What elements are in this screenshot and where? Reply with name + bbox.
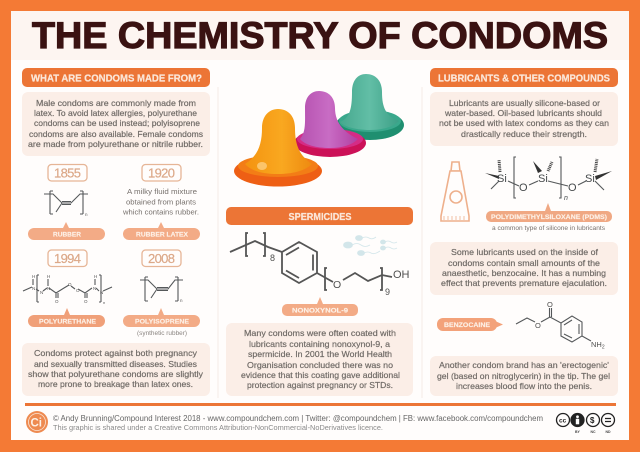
label: rubber <box>28 222 105 240</box>
chemical structure: polyurethane: H <box>32 274 35 279</box>
chemical structure: rubber: n <box>85 212 88 217</box>
text block: protection <box>22 343 210 396</box>
label: rubber latex <box>123 222 200 240</box>
text block: benzocaine: Some lubricants used on the inside of <box>451 247 599 257</box>
icon: creative commons badges <box>556 414 614 434</box>
text block: benzocaine: condoms contain small amounts of the <box>448 258 600 268</box>
year: 1994 <box>48 250 87 266</box>
text block: spermicide evidence: spermicide. In 2001 the World Health <box>248 349 392 359</box>
text block: benzocaine: anaesthetic, benzocaine. It has a numbing <box>442 268 606 278</box>
chemical structure: PDMS: O <box>568 182 577 194</box>
chemical structure: nonoxynol-9: O <box>333 279 341 291</box>
text block: erectogenic gel: gel (based on nitroglycerin) in the tip. The gel <box>437 371 610 381</box>
icon: creative commons badges: $ <box>590 416 595 425</box>
text block: spermicide evidence: Organisation concluded there was no <box>247 360 393 370</box>
chemical structure: polyurethane: N <box>47 286 50 291</box>
title: THE CHEMISTRY OF CONDOMS <box>32 14 608 56</box>
text block: male condoms: latex. To avoid latex allergies, polyurethane <box>34 108 197 118</box>
text block: male condoms: are made from polyurethane or nitrile rubber. <box>28 139 203 149</box>
icon: creative commons badges: NC <box>590 430 596 434</box>
chemical structure: benzocaine: NH <box>591 340 602 349</box>
text block: protection: Condoms protect against both pregnancy <box>34 348 198 358</box>
text block: lubricants: water-based. Oil-based lubricants should <box>444 108 602 118</box>
chemical structure: polyurethane: O <box>84 299 88 304</box>
text block: erectogenic gel: increases blood flow into the penis. <box>456 381 592 391</box>
credits: © Andy Brunning/Compound Interest 2018 - www.compoundchem.com | Twitter: @compoundchem | FB: www.facebook.com/compoundchem <box>53 414 543 423</box>
orange condom <box>234 109 322 186</box>
text block: spermicide evidence: evidence that this coating gave additional <box>241 370 400 380</box>
label: polyurethane: POLYURETHANE <box>39 318 97 325</box>
chemical structure: PDMS <box>485 157 612 202</box>
heading: what are condoms made from <box>22 68 210 87</box>
heading: lubricants <box>430 68 618 87</box>
text block: erectogenic gel: Another condom brand has an 'erectogenic' <box>439 360 609 370</box>
label: nonoxynol-9 <box>282 297 358 316</box>
chemical structure: rubber <box>44 191 88 217</box>
label: nonoxynol-9: NONOXYNOL-9 <box>292 307 349 314</box>
chemical structure: PDMS: Si <box>538 173 548 185</box>
footer rule <box>25 403 616 406</box>
text: rubber latex description: obtained from plants <box>126 198 196 206</box>
icon: lubricant tube <box>441 162 469 221</box>
text block: lubricants <box>430 92 618 146</box>
chemical structure: nonoxynol-9: OH <box>393 269 410 281</box>
chemical structure: polyurethane: N <box>93 286 96 291</box>
year: 1920 <box>142 164 181 181</box>
label: polyisoprene: POLYISOPRENE <box>135 318 190 325</box>
logo: compound interest <box>26 411 48 433</box>
chemical structure: PDMS: Si <box>585 173 595 185</box>
chemical structure: benzocaine: O <box>535 321 541 330</box>
text block: protection: and sexually transmitted diseases. Studies <box>34 359 197 369</box>
label: rubber latex: RUBBER LATEX <box>136 231 189 238</box>
text block: protection: more prone to breakage than latex ones. <box>38 379 193 389</box>
green condom <box>336 74 404 140</box>
text block: spermicide evidence: Many condoms were often coated with <box>244 328 396 338</box>
illustration: three coloured condoms <box>234 74 404 186</box>
text block: spermicide evidence: lubricants containing nonoxynol-9, a <box>249 339 390 349</box>
panel: lubricants and other compounds <box>430 68 618 396</box>
icon: creative commons badges: ND <box>606 430 611 434</box>
chemical structure: polyurethane: H <box>47 274 50 279</box>
chemical structure: polyurethane: O <box>68 282 72 287</box>
label: polyisoprene <box>123 308 200 327</box>
text block: spermicide evidence: protection against pregnancy or STDs. <box>247 380 393 390</box>
label: polyurethane <box>28 308 105 327</box>
heading: spermicides <box>226 207 413 225</box>
caption: synthetic rubber: (synthetic rubber) <box>137 331 187 337</box>
chemical structure: polyurethane: H <box>94 274 97 279</box>
text block: protection: show that polyurethane condoms are slightly <box>28 369 204 379</box>
panel: spermicides <box>226 207 413 396</box>
text block: male condoms: condoms are also available. Female condoms <box>29 129 203 139</box>
pink condom <box>294 91 366 157</box>
text block: male condoms <box>22 92 210 156</box>
chemical structure: nonoxynol-9: 9 <box>385 287 390 297</box>
logo: compound interest: Ci <box>30 418 42 430</box>
credits <box>53 414 543 432</box>
chemical structure: PDMS: O <box>519 182 528 194</box>
year: 2008: 2008 <box>148 251 175 266</box>
heading: what are condoms made from: WHAT ARE CONDOMS MADE FROM? <box>31 74 202 84</box>
label: polydimethylsiloxane: POLYDIMETHYLSILOXANE (PDMS) <box>491 214 607 221</box>
heading: spermicides: SPERMICIDES <box>288 212 352 223</box>
text block: lubricants: not be used with latex condoms as they can <box>439 118 609 128</box>
chemical structure: polyurethane: O <box>55 299 59 304</box>
chemical structure: PDMS: n <box>564 195 568 202</box>
chemical structure: benzocaine <box>516 300 605 350</box>
text block: lubricants: drastically reduce their strength. <box>461 129 587 139</box>
text block: spermicide evidence <box>226 323 413 396</box>
chemical structure: polyurethane <box>23 274 112 305</box>
chemical structure: polyurethane: n <box>103 300 105 305</box>
year: 1994: 1994 <box>54 251 81 266</box>
chemical structure: nonoxynol-9: 8 <box>270 253 275 263</box>
text block: male condoms: condoms can be used instead; polyisoprene <box>34 118 200 128</box>
chemical structure: polyurethane: N <box>100 290 103 295</box>
icon: creative commons badges: BY <box>575 430 581 434</box>
year: 2008 <box>142 250 181 266</box>
chemical structure: polyurethane: O <box>76 288 80 293</box>
chemical structure: polyurethane: N <box>40 290 43 295</box>
footer <box>26 411 614 434</box>
text block: erectogenic gel <box>430 356 618 396</box>
label: polydimethylsiloxane <box>486 203 612 222</box>
text: rubber latex description: A milky fluid mixture <box>127 187 197 196</box>
chemical structure: PDMS: Si <box>497 173 507 185</box>
text block: male condoms: Male condoms are commonly made from <box>36 98 196 108</box>
text block: lubricants: Lubricants are usually silicone-based or <box>449 98 600 108</box>
heading: lubricants: LUBRICANTS & OTHER COMPOUNDS <box>438 74 610 84</box>
text: rubber latex description <box>122 187 199 216</box>
text block: benzocaine: effect that prevents premature ejaculation. <box>441 278 607 288</box>
chemical structure: nonoxynol-9 <box>230 233 410 297</box>
chemical structure: benzocaine: 2 <box>602 344 605 350</box>
caption: common silicone: a common type of silicone in lubricants <box>492 225 605 232</box>
panel: what are condoms made from <box>22 68 210 396</box>
text block: benzocaine <box>430 242 618 295</box>
chemical structure: polyisoprene <box>140 277 183 303</box>
text: rubber latex description: which contains rubber. <box>122 208 199 216</box>
year: 1920: 1920 <box>148 166 175 180</box>
chemical structure: benzocaine: O <box>547 300 553 309</box>
label: benzocaine <box>437 318 503 331</box>
label: benzocaine: BENZOCAINE <box>444 322 491 329</box>
year: 1855: 1855 <box>54 166 81 180</box>
credits: This graphic is shared under a Creative Commons Attribution-NonCommercial-NoDerivatives licence. <box>53 423 383 432</box>
icon: sperm <box>344 236 397 256</box>
label: rubber: RUBBER <box>53 231 81 238</box>
icon: creative commons badges: cc <box>559 418 567 424</box>
chemical structure: polyisoprene: n <box>180 298 183 303</box>
year: 1855 <box>48 164 87 181</box>
chemical structure: polyurethane: N <box>32 286 35 291</box>
